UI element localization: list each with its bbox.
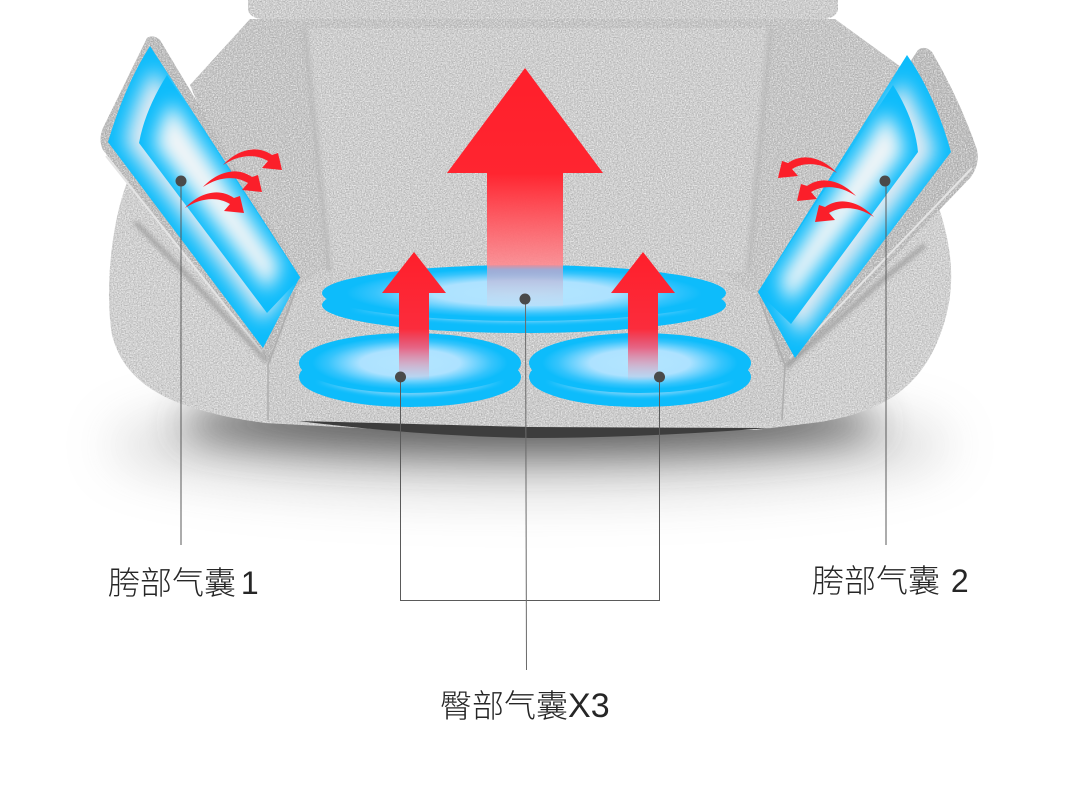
leader bracket: front airbags: [395, 372, 665, 600]
right wing backing: [757, 48, 978, 366]
leader line: centre airbag: [520, 294, 530, 670]
left wing backing: [100, 36, 302, 362]
leader line: hip airbag 1: [176, 176, 186, 545]
front left airbag: [299, 333, 521, 407]
right curved arrows: [778, 157, 874, 222]
seat back: [190, 19, 912, 310]
outer pad: [108, 46, 300, 348]
leader line: hip airbag 2: [880, 176, 890, 545]
outer cushion: [109, 150, 951, 430]
inner pad: [139, 75, 300, 313]
left small arrow: [382, 252, 446, 380]
outer pad: [750, 50, 955, 362]
right small arrow: [611, 252, 675, 380]
big centre arrow: [447, 68, 603, 306]
dark underside strip: [298, 421, 770, 438]
seat back centre panel: [305, 28, 770, 272]
shadow under seat: [110, 394, 950, 493]
left hip airbag: [108, 46, 300, 348]
label: hip airbag 2: 胯部气囊 2: [812, 563, 969, 599]
front right airbag: [529, 333, 751, 407]
right hip airbag: [750, 50, 955, 362]
seat body: [100, 0, 978, 430]
headrest base: [248, 0, 838, 19]
inner pad: [758, 85, 918, 324]
seams and stitching: [106, 28, 972, 420]
infographic: seat airbag diagram: [100, 0, 978, 720]
back airbag: [322, 265, 726, 333]
seat floor: [268, 270, 792, 427]
left curved arrows: [185, 149, 282, 213]
label: hip airbag 1: 胯部气囊 1: [108, 565, 259, 601]
label: buttock airbags x3: 臀部气囊X3: [440, 687, 610, 725]
